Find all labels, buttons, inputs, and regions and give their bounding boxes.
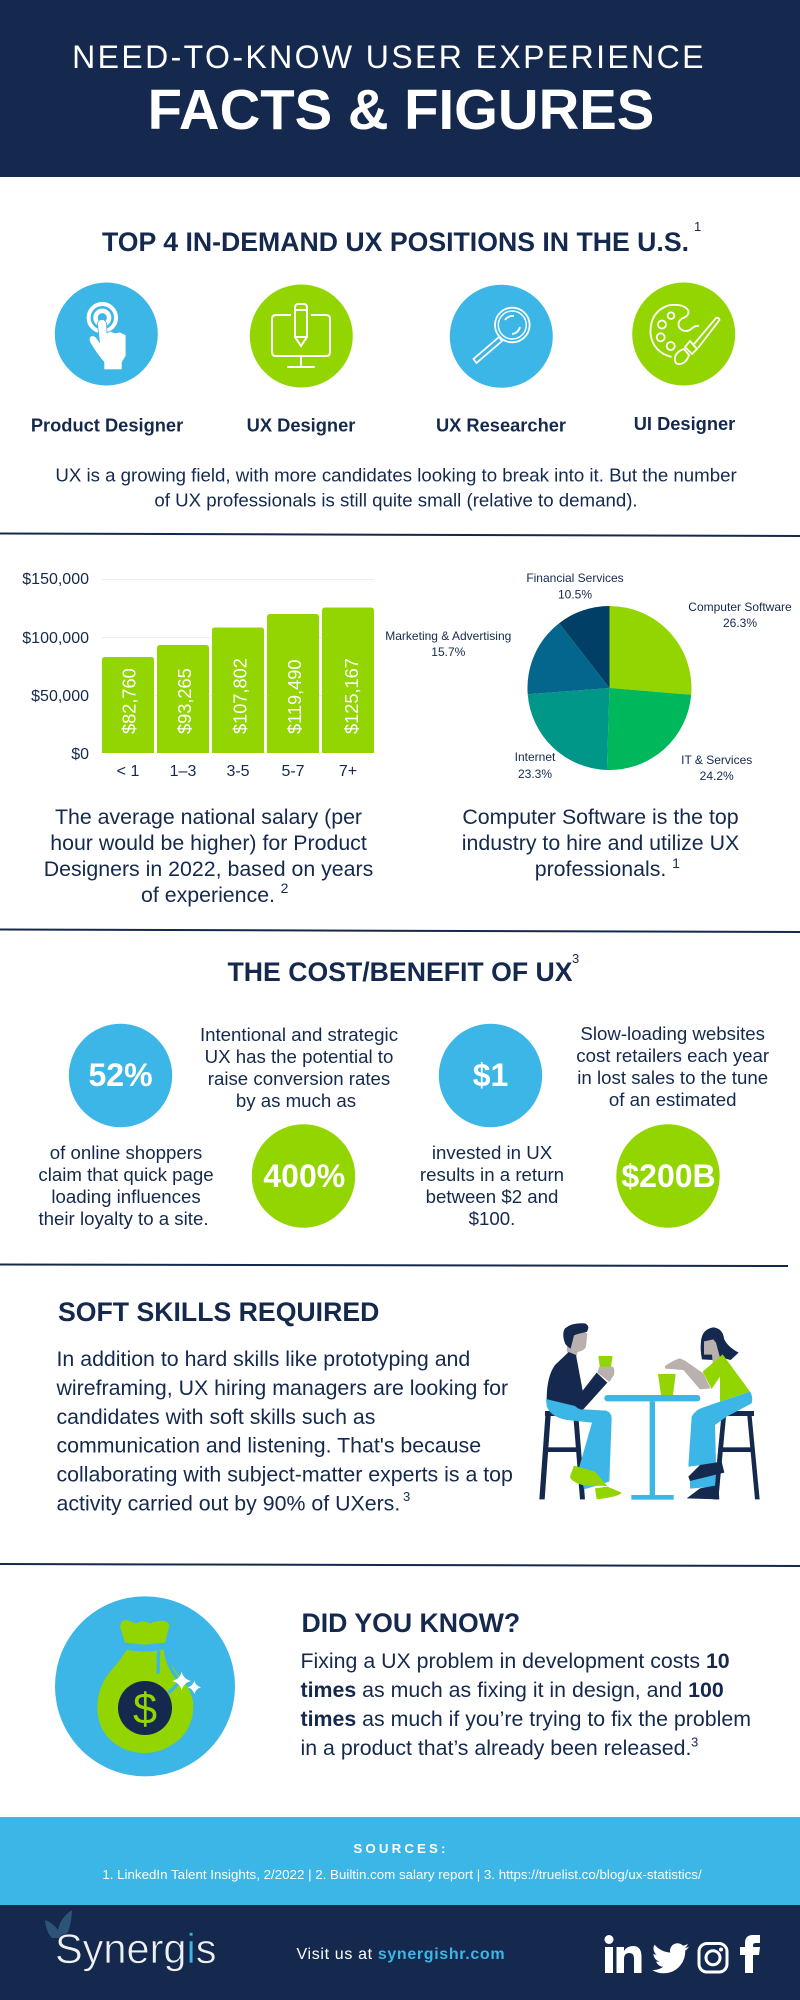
- stat: $1: [439, 1024, 542, 1127]
- heading: did you know: DID YOU KNOW?: [302, 1608, 520, 1638]
- panel: ux researcher: [450, 285, 553, 388]
- stat: $1: $1: [473, 1057, 508, 1093]
- panel: sources: 1. LinkedIn Talent Insights, 2/2022 | 2. Builtin.com salary report | 3. https://truelist.co/blog/ux-statistics/: [102, 1867, 702, 1882]
- panel: product designer: [55, 282, 158, 386]
- heading: top 4 positions: TOP 4 IN-DEMAND UX POSITIONS IN THE U.S.: [102, 227, 689, 257]
- pie chart: industries: IT & Services: [681, 753, 752, 767]
- text: did you know body: 3: [691, 1734, 698, 1750]
- illustration: two people at a table: [539, 1323, 760, 1500]
- text: soft skills body: In addition to hard skills like prototyping and: [56, 1347, 470, 1371]
- icon: linkedin: [604, 1935, 642, 1973]
- text: salary caption: Designers in 2022, based on years: [44, 857, 373, 881]
- text: growing field: UX is a growing field, with more candidates looking to break into it. But the number: [55, 464, 737, 486]
- icon: twitter: [652, 1943, 689, 1973]
- text: soft skills body: wireframing, UX hiring managers are looking for: [56, 1376, 508, 1400]
- pie chart: industries: 24.2%: [700, 769, 734, 783]
- logo wordmark: Synergis: [55, 1925, 216, 1972]
- text: invested in ux: between $2 and: [426, 1186, 558, 1207]
- position labels: Product Designer: [31, 414, 183, 436]
- heading: cost benefit: THE COST/BENEFIT OF UX: [228, 957, 573, 987]
- pie chart: industries: Internet: [515, 750, 556, 764]
- bar chart: salary by years of experience: $93,265: [175, 668, 195, 734]
- text: did you know body: times as much as fixing it in design, and 100: [300, 1678, 724, 1702]
- bar chart: salary by years of experience: < 1: [117, 763, 139, 780]
- bar chart: salary by years of experience: 5-7: [281, 763, 305, 780]
- text: invested in ux: results in a return: [420, 1164, 564, 1185]
- text: soft skills body: 3: [403, 1489, 410, 1504]
- text: online shoppers: their loyalty to a site.: [38, 1208, 209, 1229]
- text: slow loading: in lost sales to the tune: [577, 1067, 768, 1088]
- text: online shoppers: of online shoppers: [50, 1142, 202, 1163]
- heading: cost benefit: 3: [572, 951, 579, 966]
- text: software caption: Computer Software is the top: [462, 805, 739, 829]
- text: conversion rates: Intentional and strategic: [200, 1024, 398, 1045]
- icon: butterfly logo mark: [45, 1910, 72, 1938]
- heading: soft skills: SOFT SKILLS REQUIRED: [58, 1297, 379, 1327]
- position labels: [31, 413, 735, 436]
- icon: facebook: [740, 1935, 760, 1973]
- bar chart: salary by years of experience: [22, 571, 374, 780]
- bar chart: salary by years of experience: $119,490: [285, 659, 305, 734]
- pie chart: industries: 15.7%: [431, 645, 466, 659]
- pie chart: industries: 10.5%: [558, 588, 592, 602]
- text: software caption: 1: [672, 855, 680, 871]
- text: salary caption: 2: [281, 880, 289, 896]
- text: soft skills body: collaborating with subject-matter experts is a top: [56, 1463, 513, 1487]
- text: did you know body: in a product that’s already been released.: [300, 1736, 691, 1760]
- text: did you know body: [300, 1649, 751, 1760]
- text: conversion rates: raise conversion rates: [208, 1068, 390, 1089]
- pie chart: industries: Computer Software: [688, 600, 792, 614]
- bar chart: salary by years of experience: $50,000: [31, 688, 89, 705]
- panel: sources: [0, 1817, 800, 1905]
- text: conversion rates: by as much as: [236, 1090, 356, 1111]
- stat: 52%: [69, 1024, 172, 1127]
- text: visit us: Visit us at synergishr.com: [296, 1946, 505, 1963]
- text: slow loading: cost retailers each year: [576, 1045, 769, 1066]
- stat: 400%: [252, 1124, 355, 1228]
- text: slow loading: of an estimated: [609, 1089, 736, 1110]
- text: conversion rates: UX has the potential to: [205, 1046, 393, 1067]
- text: online shoppers: loading influences: [51, 1186, 201, 1207]
- text: software caption: [462, 805, 739, 881]
- panel: ui designer: [632, 282, 735, 386]
- bar chart: salary by years of experience: 3-5: [226, 763, 250, 780]
- stat: 52%: 52%: [88, 1057, 153, 1093]
- icon: money bag: $: [133, 1685, 157, 1733]
- stat: $200B: $200B: [621, 1158, 716, 1194]
- stat: $200B: [616, 1124, 720, 1228]
- text: invested in ux: invested in UX: [432, 1142, 553, 1163]
- bar chart: salary by years of experience: $82,760: [119, 668, 139, 734]
- text: online shoppers: claim that quick page: [38, 1164, 214, 1185]
- text: salary caption: of experience.: [141, 883, 275, 907]
- header banner: [0, 0, 800, 177]
- text: soft skills body: communication and listening. That's because: [56, 1434, 481, 1458]
- text: growing field: of UX professionals is still quite small (relative to demand).: [154, 490, 638, 510]
- position labels: UX Researcher: [436, 414, 566, 436]
- pie chart: industries: [385, 571, 792, 783]
- text: salary caption: [44, 805, 373, 907]
- header banner: NEED-TO-KNOW USER EXPERIENCE: [72, 39, 706, 75]
- position labels: UI Designer: [634, 413, 735, 434]
- icon: money bag: [55, 1596, 235, 1776]
- stat: 400%: 400%: [263, 1158, 345, 1194]
- text: soft skills body: activity carried out by 90% of UXers.: [56, 1492, 400, 1516]
- text: salary caption: The average national salary (per: [55, 805, 362, 829]
- position labels: UX Designer: [247, 414, 355, 436]
- heading: top 4 positions: 1: [694, 219, 701, 234]
- panel: footer: [0, 1905, 800, 2000]
- pie chart: industries: Marketing & Advertising: [385, 629, 511, 643]
- panel: ux designer: [250, 284, 353, 388]
- text: slow loading: Slow-loading websites: [580, 1023, 765, 1044]
- icon: instagram: [699, 1944, 727, 1972]
- pie chart: industries: 26.3%: [723, 616, 757, 630]
- text: did you know body: Fixing a UX problem in development costs 10: [300, 1649, 730, 1673]
- text: soft skills body: [56, 1347, 513, 1516]
- header banner: FACTS & FIGURES: [148, 78, 654, 141]
- text: software caption: industry to hire and utilize UX: [462, 831, 739, 855]
- panel: sources: SOURCES:: [353, 1841, 449, 1856]
- bar chart: salary by years of experience: $150,000: [22, 571, 89, 588]
- text: software caption: professionals.: [535, 857, 666, 881]
- pie chart: industries: 23.3%: [518, 767, 552, 781]
- text: salary caption: hour would be higher) for Product: [50, 831, 367, 855]
- bar chart: salary by years of experience: $125,167: [342, 658, 362, 734]
- bar chart: salary by years of experience: 1–3: [170, 763, 196, 780]
- text: soft skills body: candidates with soft skills such as: [56, 1405, 375, 1429]
- bar chart: salary by years of experience: $0: [71, 746, 89, 763]
- text: invested in ux: $100.: [469, 1208, 515, 1229]
- bar chart: salary by years of experience: $107,802: [230, 658, 250, 734]
- bar chart: salary by years of experience: 7+: [339, 763, 357, 780]
- text: did you know body: times as much if you’re trying to fix the problem: [300, 1707, 751, 1731]
- pie chart: industries: Financial Services: [526, 571, 624, 585]
- bar chart: salary by years of experience: $100,000: [22, 630, 89, 647]
